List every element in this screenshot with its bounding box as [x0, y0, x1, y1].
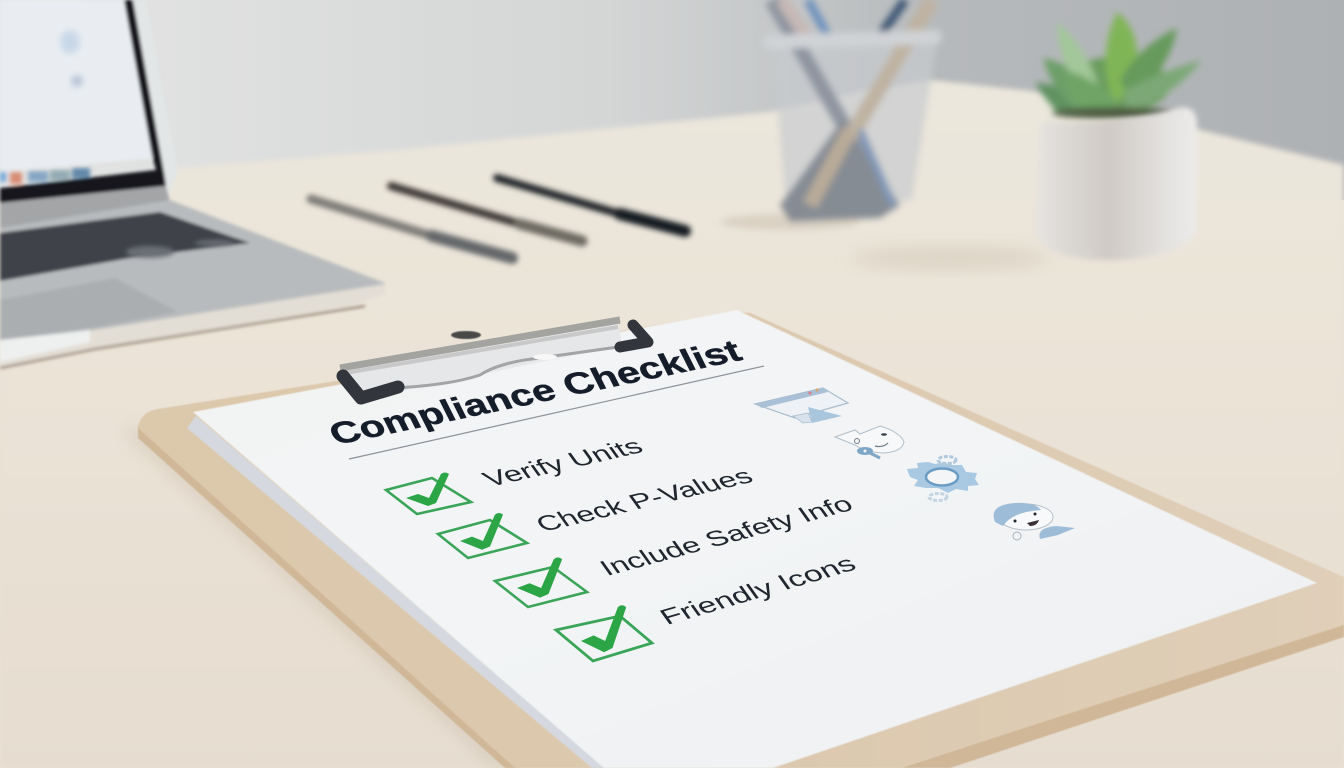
- background wall: [0, 0, 1344, 200]
- check mark: [517, 557, 562, 598]
- touchpad: [0, 278, 178, 345]
- checkbox: [438, 520, 527, 558]
- keyboard: [0, 212, 250, 281]
- checklist paper: [193, 310, 1317, 768]
- icon: browser window warning: [755, 388, 848, 423]
- board face: [138, 312, 1344, 768]
- cup rim: [770, 37, 935, 42]
- checkbox: [386, 478, 471, 514]
- clip rivet: [451, 331, 481, 339]
- glass body: [772, 36, 938, 210]
- pot: [1035, 107, 1197, 260]
- label: Friendly Icons: [654, 551, 861, 629]
- checklist item: verify units: [386, 434, 648, 514]
- checklist item: check p-values: [438, 463, 758, 558]
- icon: friendly face with key: [835, 426, 904, 458]
- clipboard clip: [340, 320, 648, 398]
- label: Include Safety Info: [594, 491, 858, 580]
- checkbox: [556, 616, 652, 661]
- clipboard board: [138, 312, 1344, 768]
- clip left grip: [343, 376, 398, 398]
- check mark: [406, 472, 449, 506]
- pen: silver: [311, 199, 512, 258]
- check mark: [581, 605, 626, 652]
- checklist item: include safety info: [495, 491, 858, 607]
- cup shadow: [720, 214, 860, 230]
- pencils: [772, 0, 932, 208]
- hinge: [0, 186, 170, 228]
- screen bezel: [0, 0, 166, 203]
- label: Verify Units: [477, 434, 648, 491]
- pens: [311, 178, 685, 258]
- laptop base: [0, 200, 385, 362]
- pencil cup: [720, 0, 938, 230]
- icon: gears: [907, 456, 979, 500]
- plant: [850, 12, 1202, 270]
- pen: dark: [391, 186, 582, 241]
- title: Compliance Checklist: [323, 333, 747, 451]
- pot shadow: [850, 246, 1050, 270]
- cup base: [780, 120, 900, 222]
- clip metal frame: [340, 320, 622, 392]
- laptop front edge: [0, 284, 385, 368]
- pen: black: [497, 178, 685, 231]
- title rule: [349, 366, 764, 459]
- succulent: [1035, 12, 1202, 119]
- checkbox: [495, 567, 587, 607]
- screen icons: [60, 30, 83, 87]
- clipboard shadow: [130, 430, 505, 768]
- icon: friendly character: [994, 503, 1075, 540]
- paper stack: [187, 416, 606, 768]
- laptop: [0, 0, 385, 368]
- laptop lid edge: [128, 0, 178, 196]
- check mark: [460, 513, 503, 550]
- clip right grip: [620, 325, 648, 347]
- label: Check P-Values: [530, 463, 758, 536]
- laptop screen: [0, 0, 154, 172]
- board edge: [138, 426, 520, 768]
- checklist item: friendly icons: [556, 551, 861, 661]
- screen dock: [0, 168, 90, 184]
